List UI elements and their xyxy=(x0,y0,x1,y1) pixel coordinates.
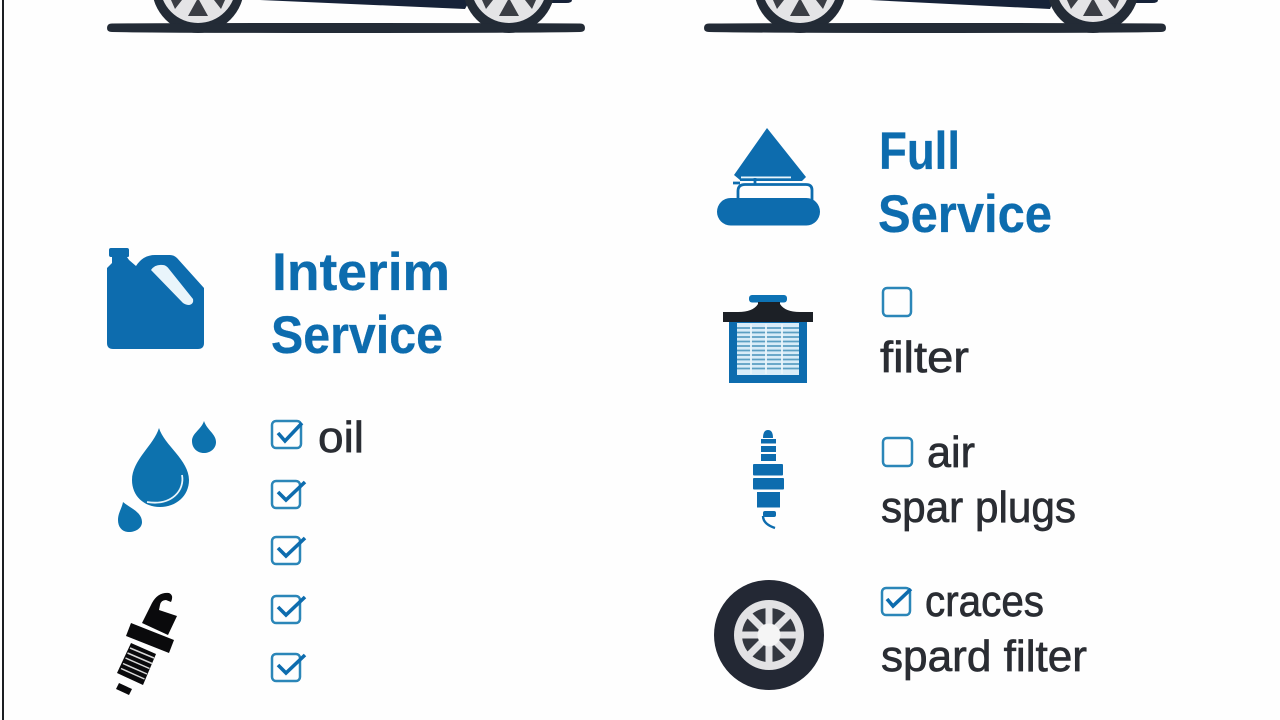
checkbox 4 xyxy=(272,596,305,623)
checkbox: filter: filter xyxy=(880,333,969,382)
panel: full service xyxy=(714,122,1087,690)
rear wheel rim xyxy=(1056,0,1130,22)
checkbox 2 xyxy=(272,481,305,508)
icon: wheel xyxy=(714,580,824,690)
front wheel tyre xyxy=(754,0,846,33)
icon: oil drops xyxy=(118,421,216,532)
checkbox: craces, spard filter: craces xyxy=(925,577,1044,626)
front wheel rim xyxy=(762,0,838,23)
illustration: left car xyxy=(107,0,585,33)
panel: interim service xyxy=(107,243,450,695)
checkbox: oil xyxy=(272,413,364,462)
icon: roof rack triangle xyxy=(717,128,820,226)
checkbox: craces, spard filter xyxy=(881,577,1087,681)
ground shadow xyxy=(107,23,585,33)
checkbox: air, spar plugs: air xyxy=(927,428,975,477)
checkbox: air, spar plugs xyxy=(881,428,1076,532)
checkbox: filter xyxy=(880,288,969,382)
car body xyxy=(260,0,572,9)
icon: oil can xyxy=(107,248,204,349)
icon: black spark plug xyxy=(116,593,177,695)
heading xyxy=(271,243,450,365)
checklist xyxy=(272,413,364,681)
checkbox: air, spar plugs: spar plugs xyxy=(881,483,1076,532)
checkbox 5 xyxy=(272,654,305,681)
heading xyxy=(878,122,1052,244)
car body xyxy=(870,0,1158,9)
checkbox: craces, spard filter: spard filter xyxy=(881,632,1087,681)
icon: blue spark plug xyxy=(753,430,784,528)
ground shadow xyxy=(704,23,1166,33)
heading: Service xyxy=(271,306,443,365)
rear wheel tyre xyxy=(1047,0,1139,33)
rear wheel tyre xyxy=(463,0,555,33)
heading: Service xyxy=(878,185,1052,244)
heading: Full xyxy=(879,122,960,181)
checklist xyxy=(880,288,1087,681)
front wheel rim xyxy=(160,0,236,23)
heading: Interim xyxy=(272,243,450,302)
checkbox 3 xyxy=(272,537,305,564)
checkbox: oil: oil xyxy=(318,413,364,462)
front wheel tyre xyxy=(152,0,244,33)
icon: air filter xyxy=(723,295,813,383)
rear wheel rim xyxy=(471,0,547,23)
illustration: right car xyxy=(704,0,1166,33)
